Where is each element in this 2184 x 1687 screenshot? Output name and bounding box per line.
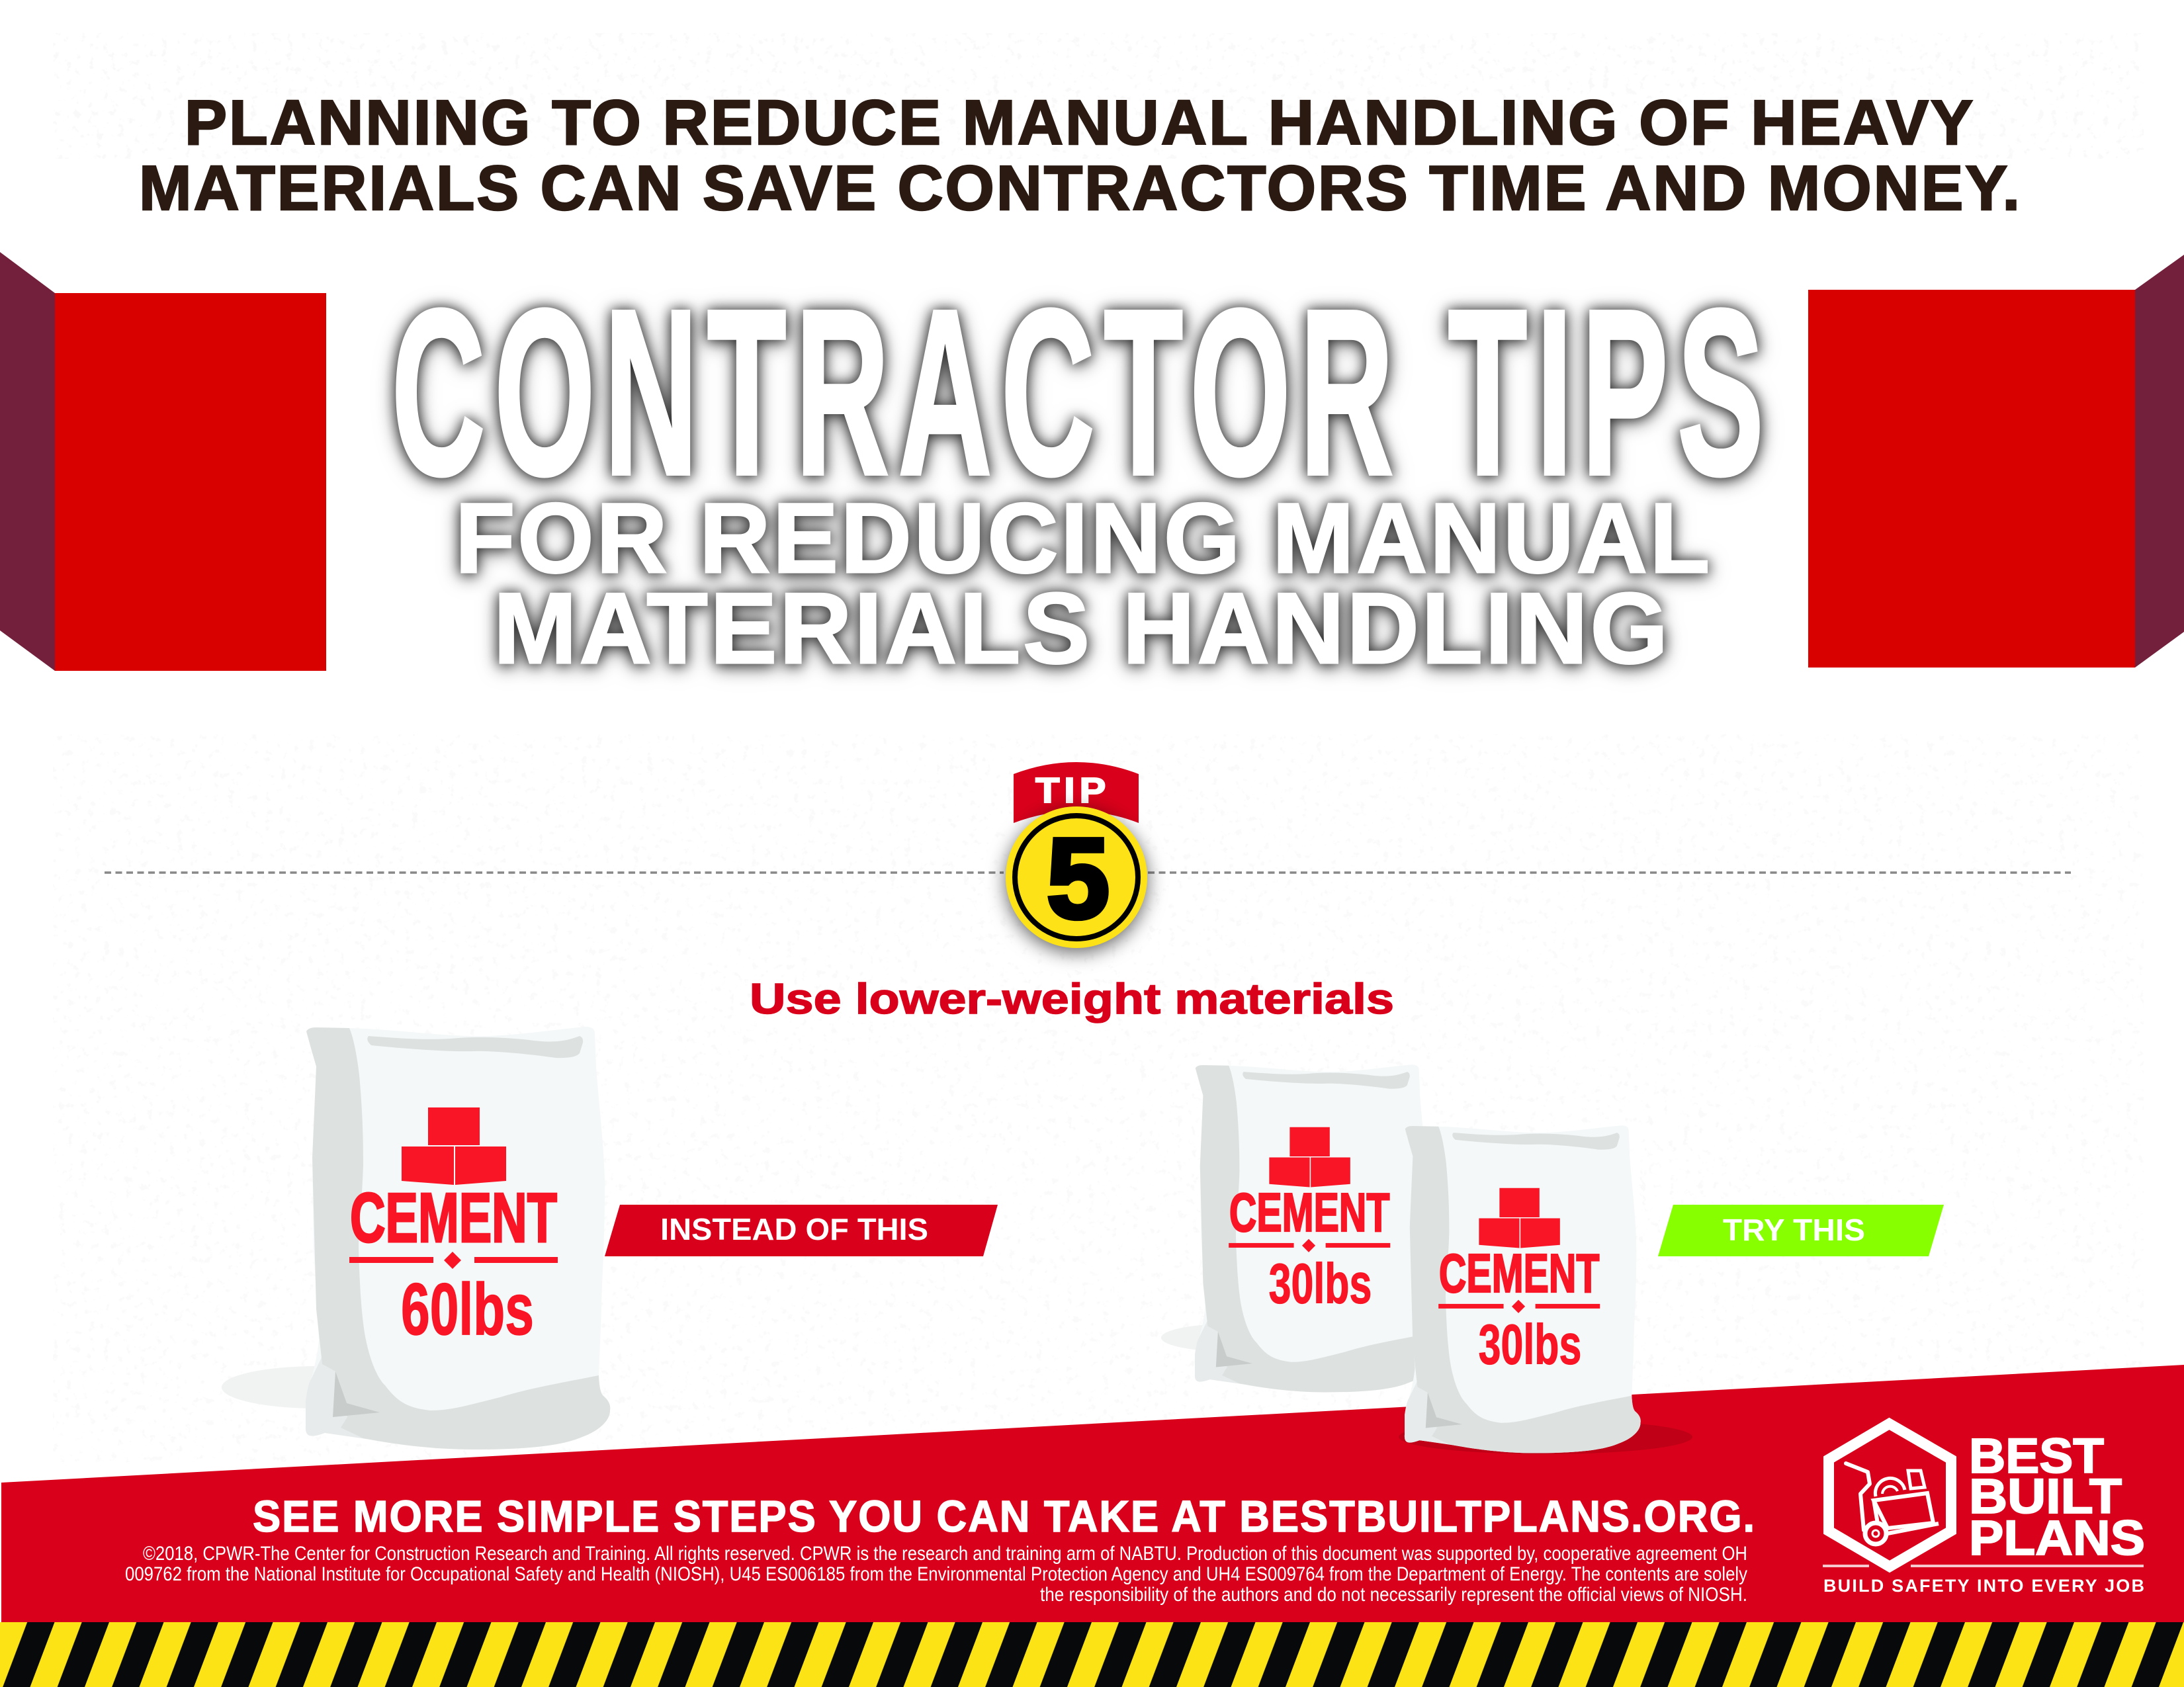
tip 5 badge bbox=[1006, 762, 1147, 948]
tip text: Use lower-weight materials bbox=[750, 974, 1394, 1023]
cement bag 60lbs bbox=[306, 1027, 610, 1449]
number circle bbox=[1006, 806, 1147, 948]
cement bag 60lbs: 60lbs bbox=[401, 1269, 534, 1350]
cement bag 30lbs rear bbox=[1195, 1064, 1431, 1392]
main title bbox=[392, 261, 1773, 685]
logo wordmark bbox=[1969, 1428, 2145, 1565]
cement bag 60lbs: CEMENT bbox=[350, 1179, 557, 1257]
cement bag 30lbs rear: 30lbs bbox=[1269, 1253, 1372, 1316]
number circle: 5 bbox=[1047, 815, 1110, 942]
floor shadows bbox=[222, 1324, 1692, 1454]
logo wordmark: PLANS bbox=[1969, 1510, 2145, 1565]
tip ribbon bbox=[1014, 762, 1139, 823]
legal text: the responsibility of the authors and do not necessarily represent the official views of NIOSH. bbox=[1040, 1584, 1747, 1606]
intro heading: MATERIALS CAN SAVE CONTRACTORS TIME AND MONEY. bbox=[139, 153, 2022, 224]
label: try this: TRY THIS bbox=[1723, 1213, 1865, 1247]
cement bag 30lbs front bbox=[1405, 1125, 1641, 1453]
cement bag 30lbs front: 30lbs bbox=[1479, 1314, 1581, 1377]
tip ribbon: TIP bbox=[1035, 771, 1110, 810]
main title: MATERIALS HANDLING bbox=[494, 572, 1671, 685]
legal text: ©2018, CPWR-The Center for Construction Research and Training. All rights reserved. CPWR is the research and training arm of NABTU. Production of this document was supported by, cooperative agreement OH bbox=[143, 1543, 1747, 1565]
label: try this bbox=[1658, 1205, 1944, 1256]
right red banner bbox=[1808, 255, 2184, 668]
main title: FOR REDUCING MANUAL bbox=[455, 482, 1712, 593]
intro heading bbox=[139, 87, 2022, 224]
footer band bbox=[1, 1365, 2184, 1622]
hazard stripe bbox=[0, 1622, 2184, 1687]
icon: hexagon with hand truck bbox=[1829, 1424, 1951, 1567]
logo tagline: BUILD SAFETY INTO EVERY JOB bbox=[1823, 1576, 2144, 1596]
cement bag 30lbs front: CEMENT bbox=[1439, 1244, 1599, 1304]
label: instead of this: INSTEAD OF THIS bbox=[660, 1212, 928, 1246]
intro heading: PLANNING TO REDUCE MANUAL HANDLING OF HEAVY bbox=[185, 87, 1975, 158]
cement bag 30lbs rear: CEMENT bbox=[1229, 1183, 1389, 1243]
label: instead of this bbox=[605, 1205, 998, 1256]
footer call to action: SEE MORE SIMPLE STEPS YOU CAN TAKE AT BESTBUILTPLANS.ORG. bbox=[253, 1492, 1756, 1541]
logo wordmark: BUILT bbox=[1969, 1469, 2122, 1524]
legal text: 009762 from the National Institute for Occupational Safety and Health (NIOSH), U45 ES006185 from the Environmental Protection Agency and UH4 ES009764 from the Department of Energy. The contents are solely bbox=[125, 1563, 1747, 1585]
best built plans logo bbox=[1823, 1424, 2145, 1596]
logo wordmark: BEST bbox=[1969, 1428, 2104, 1483]
left red banner bbox=[0, 252, 326, 671]
legal text bbox=[125, 1543, 1747, 1606]
